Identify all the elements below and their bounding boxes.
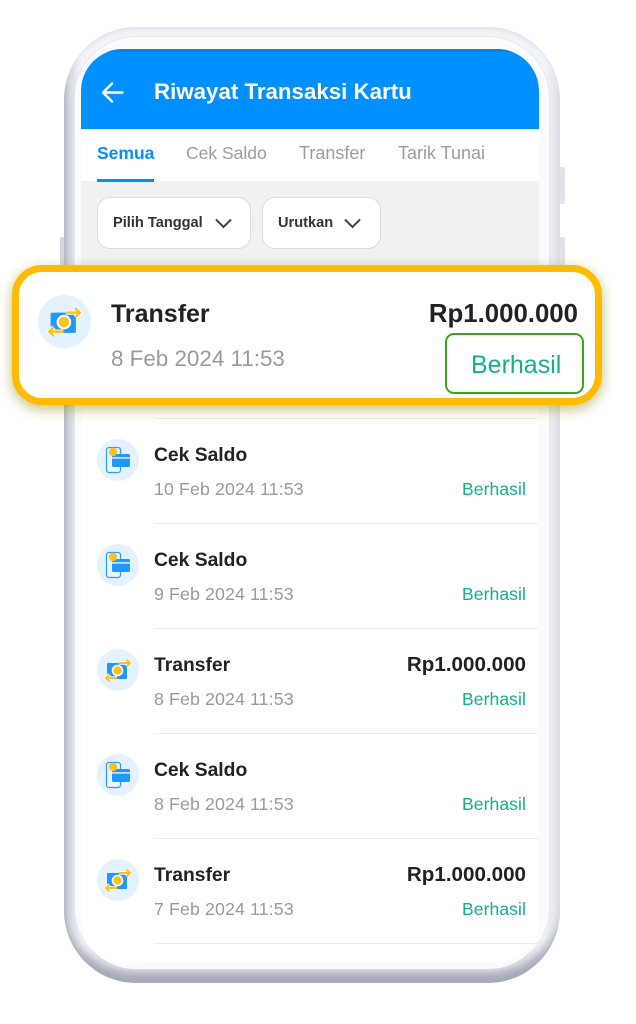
row 3: Transfer	[97, 649, 539, 734]
amount: Rp1.000.000	[429, 300, 578, 328]
date: 9 Feb 2024 11:53	[154, 584, 294, 604]
row 1: Cek Saldo	[97, 439, 539, 524]
filter: Pilih Tanggal	[97, 197, 251, 249]
filter background	[81, 181, 539, 271]
status: Berhasil	[462, 479, 526, 499]
icon: cek saldo	[97, 439, 139, 481]
header bar	[81, 49, 539, 129]
tab: Transfer: Transfer	[299, 143, 365, 163]
phone inner bezel	[74, 36, 550, 970]
icon: transfer	[97, 649, 139, 691]
date: 8 Feb 2024 11:53	[154, 794, 294, 814]
label: Urutkan	[278, 215, 333, 231]
icon: transfer	[38, 295, 91, 348]
date: 10 Feb 2024 11:53	[154, 479, 304, 499]
date: 8 Feb 2024 11:53	[154, 689, 294, 709]
filter: Urutkan	[262, 197, 381, 249]
status: Berhasil	[462, 899, 526, 919]
title: Transfer	[111, 300, 210, 328]
phone side button: right upper	[558, 167, 565, 204]
icon: chevron	[344, 218, 361, 228]
date: 8 Feb 2024 11:53	[111, 346, 285, 371]
tab: Semua: Semua	[97, 143, 154, 163]
status box	[445, 333, 584, 394]
title: Cek Saldo	[154, 760, 247, 781]
phone body	[64, 27, 560, 983]
title: Cek Saldo	[154, 445, 247, 466]
row 4: Cek Saldo	[97, 754, 539, 839]
row 5: Transfer	[97, 859, 538, 944]
icon: cek saldo	[97, 754, 139, 796]
icon: cek saldo	[97, 544, 139, 586]
tab: Tarik Tunai: Tarik Tunai	[398, 143, 485, 163]
phone side button: left	[60, 237, 66, 267]
title: Cek Saldo	[154, 550, 247, 571]
status: Berhasil	[462, 689, 526, 709]
amount: Rp1.000.000	[407, 653, 526, 676]
tab: Cek Saldo: Cek Saldo	[186, 143, 267, 163]
highlighted card	[12, 265, 602, 405]
status: Berhasil	[462, 584, 526, 604]
date: 7 Feb 2024 11:53	[154, 899, 294, 919]
status: Berhasil	[462, 794, 526, 814]
phone side button: right lower	[558, 237, 565, 267]
amount: Rp1.000.000	[407, 863, 526, 886]
icon: transfer	[97, 859, 139, 901]
row 2: Cek Saldo	[97, 544, 539, 629]
icon: back arrow	[102, 82, 124, 103]
title: Transfer	[154, 655, 230, 676]
title: Riwayat Transaksi Kartu	[154, 79, 412, 104]
status: Berhasil	[471, 351, 561, 379]
label: Pilih Tanggal	[113, 215, 203, 231]
tab underline	[97, 179, 154, 182]
title: Transfer	[154, 865, 230, 886]
app screen	[81, 49, 539, 962]
icon: chevron	[215, 218, 232, 228]
